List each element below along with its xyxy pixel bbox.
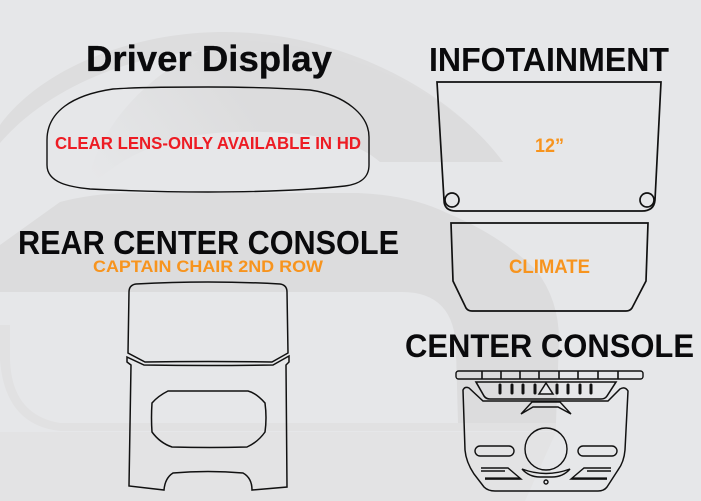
title: Center Console: CENTER CONSOLE	[405, 328, 694, 364]
panel: infotainment outline	[437, 82, 661, 211]
panel: driver display outline	[47, 87, 369, 192]
text: climate: CLIMATE	[509, 257, 590, 278]
text: 12 inch: 12”	[535, 136, 564, 157]
text: clear lens note: CLEAR LENS-ONLY AVAILABLE IN HD	[55, 133, 361, 153]
title: Driver Display: Driver Display	[86, 38, 332, 79]
panel: climate outline	[451, 223, 648, 311]
panel: center console outline	[456, 371, 643, 491]
title: Infotainment: INFOTAINMENT	[429, 41, 669, 78]
subtitle: captain chair: CAPTAIN CHAIR 2ND ROW	[93, 257, 324, 276]
panel: rear center console outline	[127, 282, 289, 490]
title: Rear Center Console: REAR CENTER CONSOLE	[18, 224, 399, 261]
